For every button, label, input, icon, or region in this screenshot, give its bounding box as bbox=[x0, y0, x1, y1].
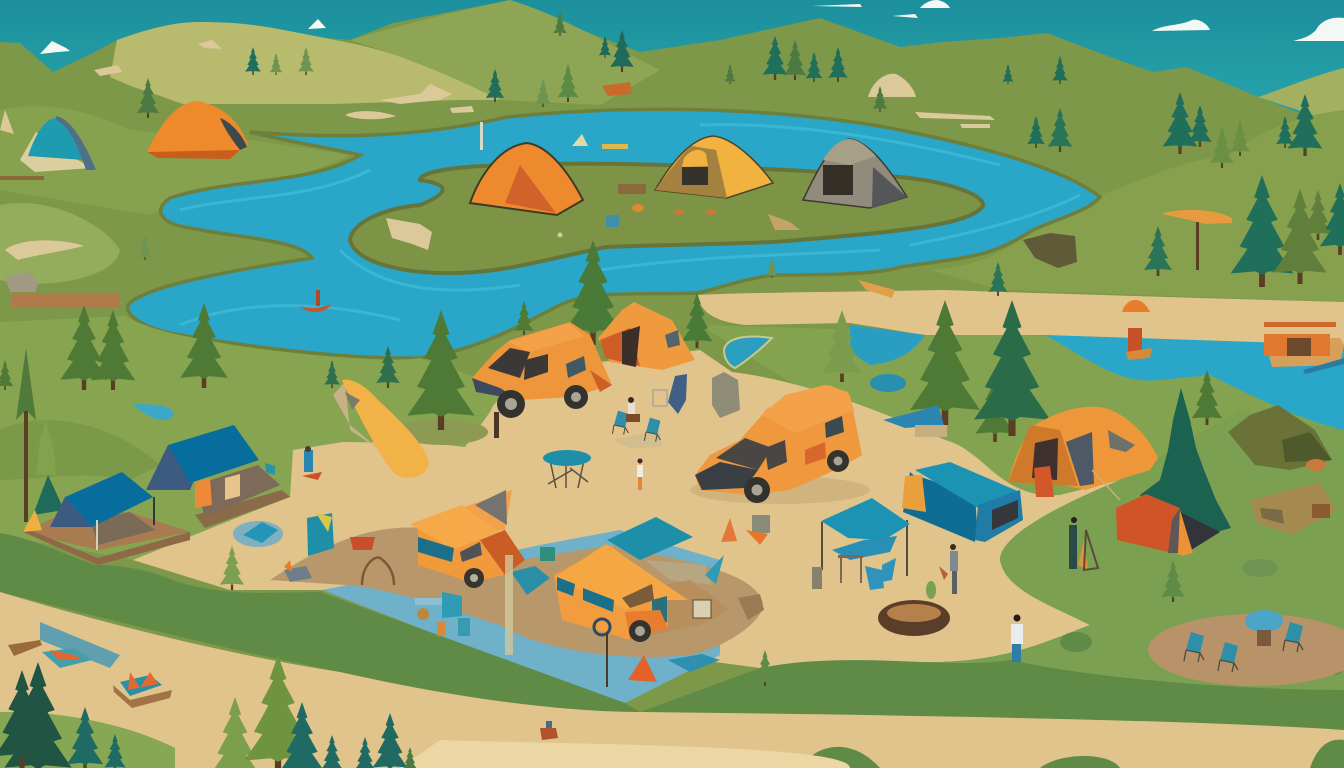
blue ground mat bbox=[322, 530, 720, 703]
person in centre bbox=[637, 458, 643, 490]
van: lower orange bbox=[554, 544, 730, 687]
island props bbox=[386, 184, 800, 250]
blue canopy table bbox=[812, 498, 910, 590]
sand strip bbox=[698, 290, 1344, 345]
lower road branch bbox=[400, 740, 850, 768]
person by canopy bbox=[939, 544, 958, 594]
pale rocks and patches bbox=[0, 40, 995, 260]
tent: far left teal dome bbox=[20, 116, 96, 172]
campfire and chair bbox=[721, 515, 770, 545]
main river bbox=[128, 109, 1100, 358]
camp site props left bbox=[284, 513, 394, 585]
shrub trees in meadow bbox=[220, 546, 1344, 686]
tent: island orange bbox=[470, 143, 583, 215]
island bbox=[350, 164, 983, 273]
orange parasol bbox=[1162, 210, 1232, 270]
tall thin pine bbox=[16, 348, 36, 522]
dock on left bank bbox=[0, 176, 120, 308]
bottom right shrubs bbox=[800, 740, 1344, 768]
tent: far left orange dome bbox=[147, 101, 248, 159]
right pines bbox=[910, 300, 1222, 442]
grey stone block bbox=[712, 372, 740, 418]
lower right meadow bbox=[640, 410, 1344, 730]
shade under pine bbox=[396, 419, 488, 445]
orange tent: by river bbox=[598, 302, 695, 370]
hikers with packs bbox=[1069, 517, 1098, 570]
tall dark pine with red tent bbox=[1140, 388, 1231, 545]
bottom left grass bbox=[0, 712, 175, 768]
river piece behind pines bbox=[850, 325, 925, 365]
blue gear by pine bbox=[883, 405, 947, 437]
river boats and items bbox=[300, 82, 1152, 360]
pond: left small bbox=[132, 404, 174, 420]
gear: table cluster bbox=[415, 592, 470, 636]
brown ground patch bbox=[270, 527, 763, 657]
mid trees bbox=[0, 240, 862, 430]
meadow: left lower knoll bbox=[0, 203, 120, 284]
lighter meadow lower right bbox=[700, 325, 1344, 560]
picnic clearing bbox=[1148, 610, 1344, 686]
gear: right of van bbox=[628, 594, 764, 682]
river highlights bbox=[180, 125, 1080, 325]
red tent bbox=[1116, 494, 1220, 556]
dark green band bbox=[0, 533, 640, 712]
shrubs near tall pine bbox=[36, 420, 56, 475]
firepit bbox=[878, 600, 950, 636]
meadow: far left slope bbox=[0, 106, 350, 215]
picnic group centre bbox=[612, 397, 662, 448]
small blue raft bbox=[233, 521, 283, 547]
foreground trees bbox=[0, 655, 417, 768]
tent: island grey bbox=[803, 139, 907, 208]
tent: yellow board bbox=[333, 380, 429, 478]
lower right meadow band bbox=[640, 660, 1344, 730]
person with camera bbox=[302, 446, 322, 480]
clouds bbox=[40, 0, 1344, 54]
right river section bbox=[1045, 335, 1344, 430]
cabin on right bbox=[1250, 459, 1336, 535]
far hill: upper centre meadow bbox=[350, 0, 660, 105]
trailer: orange with triangular roof bbox=[410, 490, 525, 588]
tent: island yellow bbox=[655, 136, 773, 198]
beach raft bbox=[113, 672, 172, 708]
van: upper left bbox=[472, 322, 612, 418]
barge bbox=[1264, 322, 1344, 374]
teal awning bbox=[607, 517, 724, 585]
round table bbox=[543, 450, 591, 488]
small gear on road bbox=[540, 721, 558, 740]
olive mound tent bbox=[1228, 405, 1332, 470]
big orange dome tent bbox=[1008, 407, 1158, 500]
pond: left bbox=[724, 336, 772, 368]
beach mat with gear bbox=[8, 622, 120, 668]
cabin: blue roof left bbox=[23, 472, 190, 565]
darker knoll lower left bbox=[0, 420, 160, 480]
main sand clearing bbox=[133, 350, 1120, 668]
person at bottom of clearing bbox=[1011, 614, 1023, 662]
van: centre right bbox=[690, 385, 870, 504]
lighter meadow lower left bbox=[0, 316, 500, 560]
gear: teal cooler and mat bbox=[505, 547, 555, 655]
small far trees bbox=[137, 12, 1344, 296]
far hill: right slope shading bbox=[930, 110, 1344, 302]
pond: right bbox=[870, 374, 906, 392]
folding chair and pack bbox=[653, 374, 687, 414]
post by tree bbox=[494, 412, 499, 438]
cabin: blue roof right bbox=[146, 425, 290, 528]
bottom road bbox=[0, 592, 1344, 768]
blue box trailer bbox=[902, 462, 1023, 542]
far hill: pale meadow bbox=[110, 22, 500, 104]
far hill: top right light slope bbox=[1258, 68, 1344, 125]
small shrub by firepit bbox=[926, 581, 936, 599]
